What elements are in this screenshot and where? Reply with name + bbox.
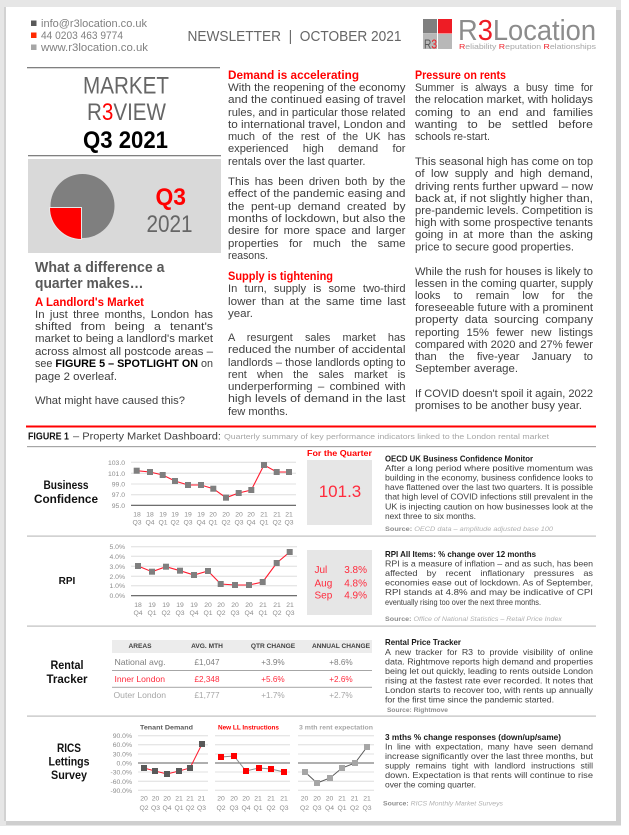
text block: demand is accelerating: properties for much the same — [228, 238, 406, 250]
text block: rental price tracker: A new tracker for R3 to provide visibility of online — [385, 648, 593, 657]
table: rental tracker: £1,777 — [194, 691, 220, 700]
chart: 3 month rent expectation: 20 — [326, 796, 333, 802]
text block: pressure on rents: high with some prospective tenants — [415, 217, 594, 229]
chart: 3 month rent expectation: 20 — [313, 796, 321, 802]
line chart: RPI: Q1 — [203, 610, 213, 617]
title: Market R3view Q3 2021: Q3 2021 — [83, 127, 168, 154]
table: rental tracker: +2.7% — [329, 691, 353, 700]
chart: tenant demand: 21 — [198, 796, 205, 802]
line chart: RPI: 19 — [148, 602, 156, 609]
table: rental tracker: +1.7% — [261, 691, 285, 700]
text block: RICS survey responses: down. Expectation is that rents will continue to rise — [385, 771, 594, 780]
text block: what a difference a quarter makes: across almost all postcode areas – — [35, 346, 213, 358]
label: business confidence: Confidence — [34, 494, 98, 506]
text block: demand is accelerating: much of the rest of the UK has — [228, 131, 406, 143]
text block: demand is accelerating — [228, 68, 406, 262]
chart: tenant demand: 20 — [152, 796, 159, 802]
text block: demand is accelerating: and the continued easing of travel — [228, 94, 406, 106]
chart: tenant demand: 20 — [163, 796, 171, 802]
line chart: business confidence: 20 — [247, 512, 255, 518]
table: rental tracker: Outer London — [114, 691, 166, 700]
chart: 3 month rent expectation: Q2 — [300, 805, 309, 812]
text block: supply is tightening: underperforming – combined with — [228, 381, 406, 393]
text block: pressure on rents: going in at more than the asking — [415, 229, 593, 241]
text block: pressure on rents — [414, 68, 594, 412]
text block: demand is accelerating: months of lockdown, but also the — [228, 213, 406, 225]
axis labels: RICS percentages: -60.0% — [110, 779, 132, 786]
chart: 3 month rent expectation: Q3 — [312, 805, 322, 812]
chart: new landlord instructions: New LL Instructions — [218, 724, 279, 732]
logo: R3Location: Reliability Reputation Relationships — [459, 42, 596, 51]
callout: for the quarter value: 101.3 — [319, 482, 361, 501]
chart: tenant demand: Tenant Demand — [140, 724, 193, 732]
text block: pressure on rents: compared with 2020 and 27% fewer — [415, 339, 593, 351]
chart: tenant demand — [138, 724, 208, 812]
text block: OECD business confidence: building in the economy, business confidence looks to — [385, 473, 593, 482]
line chart: business confidence: Q4 — [145, 520, 155, 526]
label: rental tracker: Rental — [50, 660, 84, 672]
line chart: business confidence: 18 — [133, 512, 141, 518]
text block: supply is tightening: year. — [228, 308, 253, 320]
line chart: business confidence: 97.0 — [112, 492, 125, 499]
text block: pressure on rents: promises to be another busy year. — [415, 400, 582, 412]
text block: supply is tightening: A resurgent sales market has — [228, 332, 406, 344]
line chart: business confidence: 18 — [146, 512, 154, 518]
text block: pressure on rents: property data sourcing company — [415, 314, 594, 326]
text block: pressure on rents: This seasonal high has come on top — [415, 156, 593, 168]
text block: supply is tightening: high levels of demand in the last — [228, 393, 406, 405]
line chart: business confidence: Q2 — [170, 520, 180, 526]
chart: new landlord instructions: 20 — [230, 796, 238, 802]
figure heading: Quarterly summary of key performance indicators linked to the London rental market — [224, 432, 550, 441]
text block: pressure on rents: back at, if not slightly higher than, — [415, 193, 593, 205]
line chart: RPI: 19 — [162, 602, 170, 609]
line chart: business confidence: 95.0 — [112, 503, 125, 510]
line chart: business confidence: Q2 — [221, 520, 231, 526]
text block: pressure on rents: foreseeable future with a prominent — [415, 302, 593, 314]
chart: new landlord instructions: Q2 — [266, 805, 276, 812]
panel: Q3 2021 pie graphic: Q3 — [156, 184, 186, 211]
text block: RPI all items: economies ease out of lockdown. As of September, — [385, 578, 593, 588]
table: rental tracker: QTR CHANGE — [251, 643, 296, 650]
line chart: RPI: 20 — [204, 602, 212, 609]
chart: tenant demand: Q4 — [162, 805, 172, 812]
contact details: info@r3location.co.uk — [41, 18, 148, 30]
line chart: business confidence: 19 — [171, 512, 179, 518]
table: rental tracker: £2,348 — [194, 675, 220, 684]
text block: OECD business confidence: have flattened over the last two quarters. It is possible — [385, 483, 593, 492]
text block: what a difference a quarter makes: see FIGURE 5 – SPOTLIGHT ON on — [35, 358, 213, 370]
chart: tenant demand: Q2 — [139, 805, 149, 812]
text block: OECD business confidence: UK is injecting caution on how businesses look at the — [385, 502, 593, 511]
line chart: business confidence: Q3 — [132, 520, 142, 526]
text block: RICS survey responses: Source: RICS Monthly Market Surveys — [383, 800, 504, 808]
figure heading: FIGURE 1 — [28, 432, 69, 442]
chart: tenant demand: Q1 — [174, 805, 184, 812]
chart: new landlord instructions: Q3 — [229, 805, 239, 812]
line chart: business confidence: 20 — [235, 512, 243, 518]
text block: RICS survey responses: increase significantly over the last three months, but — [385, 752, 594, 761]
line chart: business confidence: Q3 — [183, 520, 193, 526]
line chart: RPI: 21 — [286, 602, 294, 609]
line chart: business confidence: Q2 — [272, 520, 282, 526]
axis labels: RICS percentages: 90.0% — [113, 733, 132, 740]
chart: 3 month rent expectation: 21 — [363, 796, 371, 802]
text block: rental price tracker: rising at the fastest rate ever recorded. It notes that — [385, 676, 594, 685]
line chart: business confidence: 101.0 — [108, 471, 125, 478]
line chart: RPI: 21 — [273, 602, 281, 609]
chart: new landlord instructions: Q3 — [279, 805, 289, 812]
line chart: RPI: 2.0% — [110, 574, 125, 581]
line chart: business confidence — [108, 460, 296, 526]
label: rental tracker: Tracker — [46, 674, 88, 686]
text block: demand is accelerating: to international travel, London and — [228, 119, 406, 131]
callout: monthly RPI values: 3.8% — [344, 565, 367, 576]
line chart: business confidence: Q1 — [259, 520, 269, 526]
text block: pressure on rents: of low supply and high demand, — [415, 168, 593, 180]
callout: monthly RPI values: Jul — [314, 565, 327, 576]
chart: 3 month rent expectation: Q2 — [350, 805, 359, 812]
callout: monthly RPI values: 4.8% — [344, 578, 367, 590]
chart: new landlord instructions: 20 — [217, 796, 225, 802]
line chart: business confidence: 21 — [285, 512, 293, 518]
text block: rental price tracker — [385, 638, 594, 714]
chart: new landlord instructions: Q1 — [253, 805, 263, 812]
text block: supply is tightening: In turn, supply is some two-third — [228, 283, 406, 295]
axis labels: RICS percentages: 60.0% — [113, 742, 132, 749]
text block: demand is accelerating: This has been driven both by the — [228, 176, 406, 188]
line chart: RPI: Q2 — [272, 610, 282, 617]
chart: new landlord instructions: 21 — [280, 796, 288, 802]
text block: what a difference a quarter makes: In just three months, London has — [35, 309, 214, 321]
chart: 3 month rent expectation — [298, 724, 374, 812]
text block: RICS survey responses: In line with expectation, many have seen demand — [385, 742, 593, 751]
line chart: business confidence: 103.0 — [108, 460, 125, 467]
text block: demand is accelerating: effect of the pandemic easing and — [228, 188, 406, 200]
line chart: RPI — [110, 544, 297, 617]
chart: 3 month rent expectation: Q4 — [325, 805, 334, 812]
text block: what a difference a quarter makes — [35, 260, 214, 407]
line chart: RPI: Q2 — [216, 610, 226, 617]
chart: tenant demand: Q3 — [197, 805, 206, 812]
text block: supply is tightening — [228, 269, 406, 418]
text block: pressure on rents: schools re-start. — [415, 131, 490, 143]
chart: 3 month rent expectation: Q1 — [337, 805, 347, 812]
table: rental tracker: AVG. MTH — [191, 643, 223, 650]
text block: pressure on rents: looks to remain low for the — [415, 290, 593, 302]
text block: rental price tracker: for the first time since the pandemic started. — [385, 695, 554, 704]
axis labels: RICS percentages: -30.0% — [110, 770, 132, 776]
label: RPI: RPI — [59, 576, 76, 587]
text block: demand is accelerating: With the reopening of the economy — [228, 82, 406, 94]
text block: supply is tightening: reduced the number of accidental — [228, 344, 406, 356]
text block: OECD business confidence: Source: OECD data – amplitude adjusted base 100 — [385, 526, 553, 533]
text block: RPI all items: RPI stands at 4.8% and may be indicative of CPI — [385, 588, 593, 597]
text block: pressure on rents: wanting to be settled before — [414, 119, 593, 131]
text block: pressure on rents: September average. — [415, 363, 518, 375]
text block: rental price tracker: data. Rightmove reports high demand and properties — [385, 658, 593, 667]
line chart: business confidence: Q3 — [234, 520, 244, 526]
contact details: www.r3location.co.uk — [40, 42, 149, 54]
text block: pressure on rents: Summer is always a busy time for — [415, 82, 593, 94]
text block: what a difference a quarter makes: shifted from being a tenant's — [35, 321, 214, 333]
text block: OECD business confidence: OECD UK Business Confidence Monitor — [385, 454, 534, 464]
text block: pressure on rents: Pressure on rents — [415, 68, 506, 82]
logo: R3Location: R3Location — [458, 15, 596, 47]
text block: OECD business confidence: next three to six months. — [385, 512, 476, 521]
text block: supply is tightening: lower than at the same time last — [228, 296, 406, 308]
line chart: business confidence: 21 — [260, 512, 268, 518]
text block: demand is accelerating: rules, and in particular those related — [228, 107, 406, 119]
text block: pressure on rents: than the five-year January to — [415, 351, 593, 363]
text block: demand is accelerating: reasons. — [228, 250, 268, 262]
line chart: business confidence: Q1 — [208, 520, 218, 526]
axis labels: RICS percentages: -90.0% — [110, 788, 132, 795]
text block: pressure on rents: pre-pandemic levels. Competition is — [415, 205, 594, 217]
line chart: RPI: 3.0% — [110, 564, 125, 571]
text block: RPI all items: eventually rising too over the next three months. — [385, 598, 541, 607]
line chart: RPI: Q4 — [244, 610, 254, 617]
line chart: RPI: Q4 — [133, 610, 143, 617]
line chart: RPI: Q3 — [175, 610, 185, 617]
chart: new landlord instructions: 21 — [254, 796, 262, 802]
table: rental tracker: National avg. — [114, 658, 166, 667]
table: rental tracker: +5.6% — [261, 675, 285, 684]
text block: what a difference a quarter makes: market to being a landlord's market — [35, 333, 213, 345]
text block: RPI all items: Source: Office of National Statistics – Retail Price Index — [385, 616, 563, 623]
text block: rental price tracker: Source: Rightmove — [387, 707, 448, 714]
line chart: RPI: 20 — [245, 602, 253, 609]
text block: RPI all items: RPI All Items: % change over 12 months — [385, 550, 536, 559]
label: rental tracker — [46, 660, 88, 686]
line chart: business confidence: 20 — [209, 512, 217, 518]
text block: OECD business confidence — [385, 454, 593, 533]
table: rental tracker: £1,047 — [194, 658, 220, 667]
chart: tenant demand: 21 — [186, 796, 194, 802]
table: rental tracker: ANNUAL CHANGE — [312, 643, 371, 650]
logo: R3Location — [423, 15, 596, 52]
newsletter date heading: NEWSLETTER | OCTOBER 2021 — [188, 28, 402, 45]
text block: rental price tracker: being let out quickly, leading to rents outside London — [385, 667, 593, 676]
text block: demand is accelerating: experienced high demand for — [228, 143, 406, 155]
line chart: RPI: Q1 — [147, 610, 157, 617]
line chart: RPI: Q3 — [285, 610, 295, 617]
text block: pressure on rents: coming to an end and families — [415, 107, 594, 119]
text block: what a difference a quarter makes: quarter makes… — [35, 276, 144, 292]
text block: RPI all items: RPI is a measure of inflation – and as such, has been — [385, 560, 593, 568]
line chart: RPI: 5.0% — [110, 544, 125, 551]
figure heading: – Property Market Dashboard: — [73, 432, 221, 442]
text block: demand is accelerating: rentals over the last quarter. — [228, 156, 366, 168]
line chart: RPI: 19 — [176, 602, 184, 609]
text block: what a difference a quarter makes: What a difference a — [35, 260, 165, 276]
chart: tenant demand: 21 — [175, 796, 183, 802]
text block: what a difference a quarter makes: A Landlord's Market — [35, 295, 144, 309]
figure heading — [28, 432, 550, 442]
text block: pressure on rents: reporting 15% fewer new listings — [415, 327, 594, 339]
line chart: business confidence: 99.0 — [112, 482, 125, 488]
label: RICS lettings survey: RICS — [57, 743, 81, 755]
callout: monthly RPI values: 4.9% — [344, 590, 367, 602]
line chart: business confidence: Q4 — [196, 520, 206, 526]
text block: RICS survey responses: over the coming quarter. — [385, 780, 476, 789]
chart: tenant demand: 20 — [140, 796, 148, 802]
label: RICS lettings survey: Survey — [51, 770, 88, 782]
table: rental tracker: +8.6% — [329, 658, 353, 667]
text block: pressure on rents: price to secure good properties. — [415, 242, 574, 254]
line chart: business confidence: 19 — [184, 512, 192, 518]
line chart: business confidence: 19 — [197, 512, 205, 518]
label: business confidence — [34, 480, 98, 506]
label: RICS lettings survey — [48, 743, 90, 782]
callout: monthly RPI values: Sep — [314, 590, 333, 602]
table: rental tracker — [112, 640, 372, 700]
text block: pressure on rents: If COVID doesn't spoil it again, 2022 — [415, 388, 593, 400]
table: rental tracker: AREAS — [128, 643, 152, 650]
text block: pressure on rents: lessen in the coming quarter, supply — [415, 278, 594, 290]
text block: pressure on rents: the relocation market, with holidays — [415, 94, 594, 106]
text block: RPI all items — [385, 550, 593, 623]
text block: OECD business confidence: After a long period where positive momentum was — [385, 464, 593, 473]
callout: for the quarter value: For the Quarter — [307, 448, 373, 458]
axis labels: RICS percentages — [110, 733, 132, 795]
chart: tenant demand: Q3 — [151, 805, 160, 812]
line chart: RPI: 1.0% — [110, 583, 125, 590]
table: rental tracker: Inner London — [114, 675, 165, 684]
text block: RICS survey responses — [383, 733, 594, 808]
callout: for the quarter value — [307, 448, 373, 525]
line chart: RPI: 4.0% — [110, 554, 125, 561]
line chart: business confidence: Q3 — [284, 520, 294, 526]
line chart: RPI: 18 — [134, 602, 142, 609]
panel: Q3 2021 pie graphic — [28, 159, 221, 253]
line chart: business confidence: Q1 — [158, 520, 168, 526]
line chart: RPI: 20 — [231, 602, 239, 609]
chart: 3 month rent expectation: 21 — [338, 796, 346, 802]
line chart: RPI: Q4 — [189, 610, 199, 617]
text block: RICS survey responses: supply remains tight with landlord instructions still — [385, 761, 593, 770]
text block: RPI all items: affected by recent inflationary pressures as — [385, 569, 593, 578]
text block: what a difference a quarter makes: page 2 overleaf. — [35, 371, 117, 383]
text block: supply is tightening: few months. — [228, 406, 288, 418]
chart: tenant demand: Q2 — [185, 805, 195, 812]
text block: what a difference a quarter makes: What might have caused this? — [35, 395, 185, 407]
text block: demand is accelerating: desire for more space and larger — [228, 225, 406, 237]
table: rental tracker: +2.6% — [329, 675, 353, 684]
line chart: RPI: 0.0% — [110, 593, 125, 600]
chart: new landlord instructions: Q4 — [241, 805, 251, 812]
line chart: RPI: Q2 — [161, 610, 171, 617]
label: RICS lettings survey: Lettings — [48, 756, 90, 768]
chart: new landlord instructions — [215, 724, 290, 812]
line chart: RPI: Q1 — [258, 610, 268, 617]
chart: new landlord instructions: Q2 — [216, 805, 226, 812]
text block: supply is tightening: rent when the sales market is — [228, 369, 406, 381]
text block: supply is tightening: landlords – those landlords opting to — [228, 357, 406, 369]
text block: pressure on rents: While the rush for houses is likely to — [415, 266, 593, 278]
line chart: RPI: 21 — [259, 602, 267, 609]
contact details: 44 0203 463 9774 — [41, 30, 123, 42]
title: Market R3view Q3 2021: R3VIEW — [87, 99, 166, 126]
line chart: RPI: 19 — [190, 602, 198, 609]
logo: R3Location: R3 — [424, 36, 437, 52]
text block: OECD business confidence: that high level of COVID infections still prevalent in the — [385, 493, 593, 502]
text block: RICS survey responses: 3 mths % change responses (down/up/same) — [385, 733, 561, 742]
chart: 3 month rent expectation: 21 — [351, 796, 358, 802]
text block: rental price tracker: Rental Price Tracker — [385, 638, 462, 647]
contact details — [31, 18, 149, 54]
text block: pressure on rents: driving rents further upward – now — [415, 181, 593, 193]
chart: new landlord instructions: 20 — [242, 796, 250, 802]
line chart: business confidence: 20 — [222, 512, 230, 518]
panel: Q3 2021 pie graphic: 2021 — [146, 211, 192, 238]
callout: monthly RPI values — [307, 550, 372, 615]
title: Market R3view Q3 2021: MARKET — [83, 72, 169, 100]
chart: 3 month rent expectation: Q3 — [362, 805, 372, 812]
icon: pie chart with red quarter — [50, 174, 114, 240]
text block: supply is tightening: Supply is tightening — [228, 269, 333, 283]
title: Market R3view Q3 2021 — [83, 72, 169, 154]
chart: new landlord instructions: 21 — [267, 796, 275, 802]
line chart: business confidence: 21 — [273, 512, 281, 518]
text block: rental price tracker: London starts to recover too, with rents up annually — [385, 686, 594, 695]
chart: 3 month rent expectation: 20 — [301, 796, 308, 802]
callout: monthly RPI values: Aug — [314, 578, 332, 590]
text block: demand is accelerating: Demand is accelerating — [228, 68, 359, 82]
table: rental tracker: +3.9% — [261, 658, 285, 667]
chart: 3 month rent expectation: 3 mth rent expectation — [299, 724, 373, 732]
axis labels: RICS percentages: 0.0% — [116, 760, 132, 768]
line chart: business confidence: Q4 — [246, 520, 256, 526]
line chart: business confidence: 19 — [159, 512, 167, 518]
axis labels: RICS percentages: 30.0% — [113, 752, 132, 758]
line chart: RPI: Q3 — [230, 610, 240, 617]
text block: demand is accelerating: the pent-up demand created by — [228, 201, 406, 213]
line chart: RPI: 20 — [217, 602, 225, 609]
label: business confidence: Business — [44, 480, 88, 492]
